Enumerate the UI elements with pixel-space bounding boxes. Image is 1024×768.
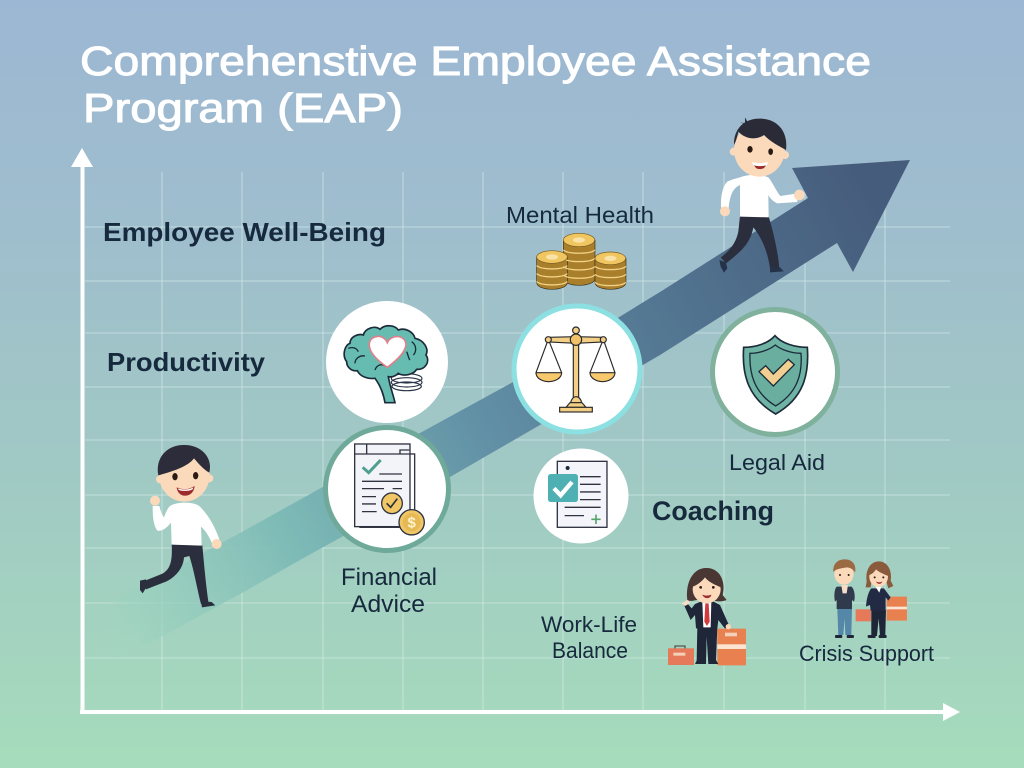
label: work-life balance: Work-Life bbox=[541, 612, 637, 637]
figure: businesswoman with briefcases bbox=[668, 568, 746, 665]
icon: brain with heart bbox=[326, 301, 448, 423]
horizontal axis: x axis bbox=[80, 703, 960, 721]
figure: running man top right bbox=[719, 117, 805, 273]
label: work-life balance: Balance bbox=[552, 638, 628, 663]
title bbox=[80, 38, 871, 131]
label: financial advice: Advice bbox=[351, 591, 425, 618]
icon: shield with check bbox=[712, 310, 838, 434]
icon: coin stacks bbox=[537, 233, 626, 289]
title: Program (EAP) bbox=[83, 85, 403, 131]
icon: financial document with coin: $ bbox=[408, 516, 416, 532]
vertical axis: y axis bbox=[71, 148, 93, 714]
title: Comprehenstive Employee Assistance bbox=[80, 38, 871, 84]
label: legal aid: Legal Aid bbox=[729, 450, 825, 475]
icon: balance scales bbox=[514, 306, 640, 432]
label: coaching: Coaching bbox=[652, 496, 774, 526]
label: work-life balance bbox=[541, 612, 637, 663]
figure: running man bottom left bbox=[140, 445, 222, 607]
figure: two colleagues with briefcases bbox=[833, 559, 907, 638]
label: crisis support: Crisis Support bbox=[799, 641, 934, 666]
label: employee well-being: Employee Well-Being bbox=[103, 217, 386, 247]
icon: financial document with coin bbox=[326, 428, 448, 550]
icon: coaching checklist bbox=[534, 448, 628, 544]
label: financial advice bbox=[341, 564, 437, 618]
label: financial advice: Financial bbox=[341, 564, 437, 591]
label: productivity: Productivity bbox=[107, 347, 266, 377]
growth arrow bbox=[93, 160, 910, 672]
label: mental health: Mental Health bbox=[506, 202, 654, 228]
